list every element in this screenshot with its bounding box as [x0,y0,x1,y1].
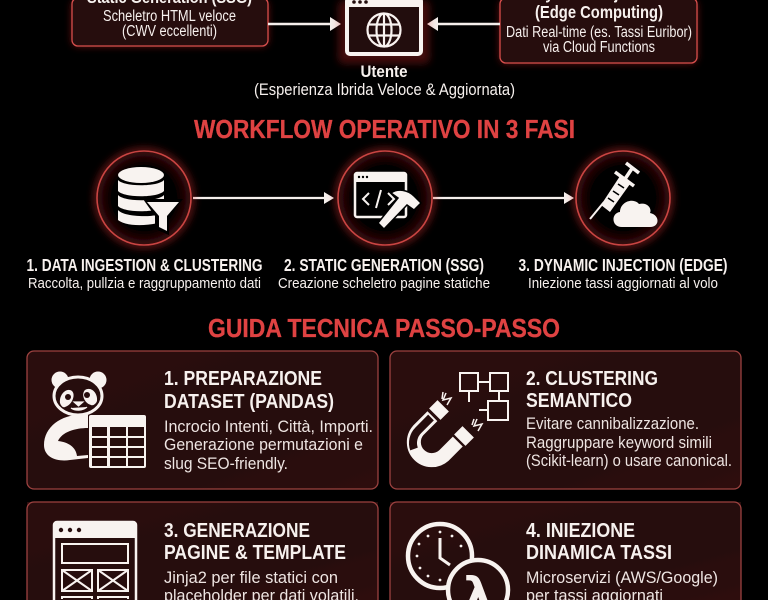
text: static generation description [103,8,236,40]
icon: page template [54,522,136,600]
icon: code window and hammer [338,151,432,245]
text: dynamic injection description [506,24,692,56]
label: step 2: 2. STATIC GENERATION (SSG) [284,255,484,275]
text: card 1: Generazione permutazioni e [164,435,363,454]
arrow: step 2 to 3 [433,192,574,204]
label: utente [254,62,515,99]
step 1: data ingestion [26,151,262,292]
text: card 2: Raggruppare keyword simili [526,433,712,452]
icon: user browser [338,0,430,64]
label: step 2: Creazione scheletro pagine statiche [278,275,490,292]
label: step 1: Raccolta, pullzia e raggruppamento dati [28,275,261,292]
arrow: step 1 to 2 [193,192,334,204]
card 4: iniezione dinamica [390,502,741,600]
arrow: dynamic to user [427,17,500,31]
label: step 3 [518,255,728,292]
label: step 2 [278,255,490,292]
panel: static generation [72,0,268,46]
text: card 1: slug SEO-friendly. [164,454,288,473]
arrow: static to user [268,17,341,31]
step 3: dynamic injection [518,151,728,292]
heading: card 4: DINAMICA TASSI [526,541,672,564]
text: card 4: Microservizi (AWS/Google) [526,568,718,587]
step 2: static generation [278,151,490,292]
heading: card 2: SEMANTICO [526,389,632,412]
text: static generation description: (CWV eccellenti) [122,23,217,40]
icon: magnet and nodes [413,373,508,460]
heading: card 3: PAGINE & TEMPLATE [164,541,346,564]
heading: card 2 [526,367,658,412]
text: dynamic injection description: via Cloud Functions [543,39,655,56]
heading: card 1: DATASET (PANDAS) [164,390,334,413]
label: utente: (Esperienza Ibrida Veloce & Aggiornata) [254,80,515,99]
heading: card 4: 4. INIEZIONE [526,519,635,542]
icon: clock and lambda [408,524,508,600]
heading: dynamic injection: (Edge Computing) [535,2,663,22]
heading: card 1 [164,367,334,413]
text: card 2: (Scikit-learn) o usare canonical. [526,451,732,470]
text: card 1: Incrocio Intenti, Città, Importi. [164,417,373,436]
text: card 3 [164,568,359,600]
heading: card 4 [526,519,672,564]
card 2: clustering semantico [390,351,741,489]
heading: card 2: 2. CLUSTERING [526,367,658,390]
label: step 1 [26,255,262,292]
icon: panda with table [44,372,146,468]
panel: dynamic injection [500,0,697,63]
text: card 3: Jinja2 per file statici con [164,568,338,587]
text: card 2 [526,414,732,470]
text: card 2: Evitare cannibalizzazione. [526,414,699,433]
card 1: preparazione dataset [27,351,378,489]
text: dynamic injection description: Dati Real-time (es. Tassi Euribor) [506,24,692,41]
heading: card 1: 1. PREPARAZIONE [164,367,322,390]
label: step 3: Iniezione tassi aggiornati al volo [528,275,718,292]
label: utente: Utente [360,62,408,81]
text: card 4 [526,568,718,600]
text: card 1 [164,417,373,473]
title: guida tecnica: GUIDA TECNICA PASSO-PASSO [208,313,560,343]
heading: card 3 [164,519,346,564]
card 3: generazione pagine [27,502,378,600]
icon: database and funnel [97,151,191,245]
title: workflow: WORKFLOW OPERATIVO IN 3 FASI [194,114,575,144]
icon: syringe and cloud [576,151,670,245]
label: step 1: 1. DATA INGESTION & CLUSTERING [26,255,262,275]
text: static generation description: Scheletro HTML veloce [103,8,236,25]
heading: card 3: 3. GENERAZIONE [164,519,310,542]
